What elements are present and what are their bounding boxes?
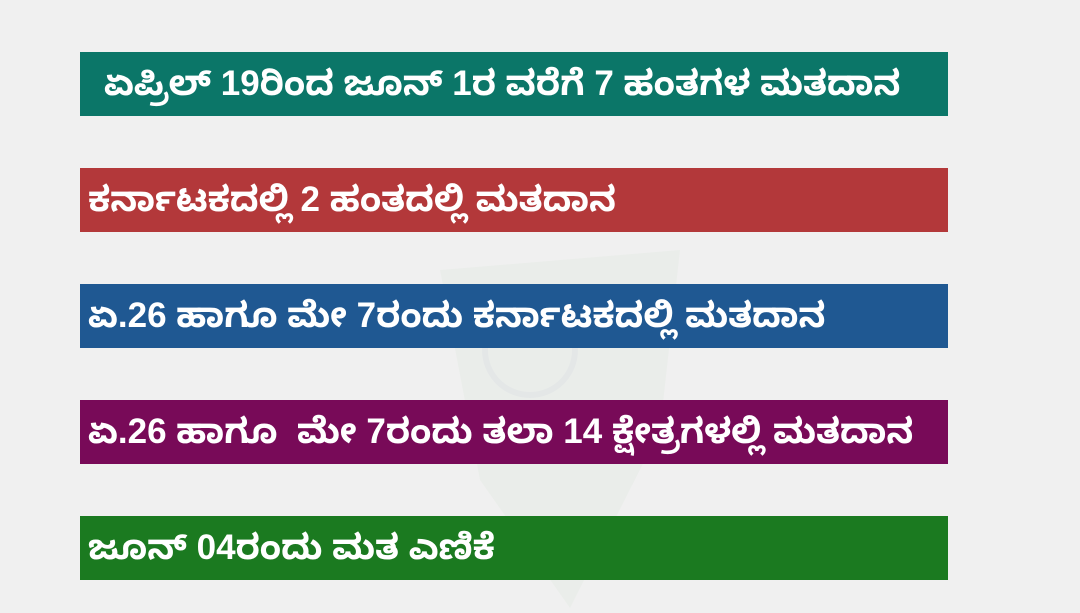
bar 4: 14 constituencies each	[80, 400, 948, 464]
bar 3: dates	[80, 284, 948, 348]
bar 5: counting: ಜೂನ್ 04ರಂದು ಮತ ಎಣಿಕೆ	[88, 528, 495, 567]
bar 5: counting	[80, 516, 948, 580]
bar 2: Karnataka two phases	[80, 168, 948, 232]
bar 3: dates: ಏ.26 ಹಾಗೂ ಮೇ 7ರಂದು ಕರ್ನಾಟಕದಲ್ಲಿ ಮತದಾನ	[88, 296, 825, 335]
bar 2: Karnataka two phases: ಕರ್ನಾಟಕದಲ್ಲಿ 2 ಹಂತದಲ್ಲಿ ಮತದಾನ	[88, 180, 616, 219]
bar 4: 14 constituencies each: ಏ.26 ಹಾಗೂ ಮೇ 7ರಂದು ತಲಾ 14 ಕ್ಷೇತ್ರಗಳಲ್ಲಿ ಮತದಾನ	[88, 412, 913, 451]
bar 1: election phases: ಏಪ್ರಿಲ್ 19ರಿಂದ ಜೂನ್ 1ರ ವರೆಗೆ 7 ಹಂತಗಳ ಮತದಾನ	[104, 64, 900, 103]
bar 1: election phases	[80, 52, 948, 116]
watermark: faint map	[482, 348, 578, 398]
